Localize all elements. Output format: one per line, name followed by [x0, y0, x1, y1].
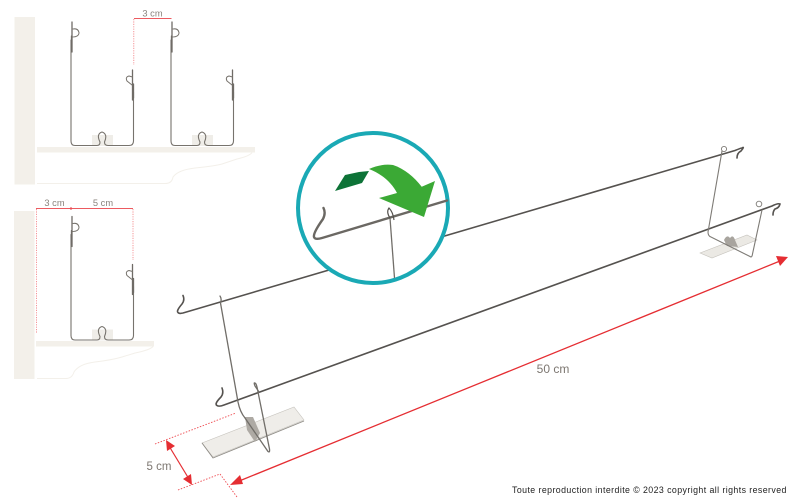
label: 50 cm: 50 cm [537, 362, 569, 376]
clip [724, 236, 738, 247]
shelf [36, 341, 154, 346]
wall [14, 17, 35, 184]
plate [700, 235, 757, 258]
front wire [216, 204, 780, 406]
panel: lower section view, 3 cm and 5 cm [14, 198, 154, 379]
hanger wire [708, 151, 762, 257]
profile [71, 216, 134, 340]
dimension: 5 cm arrow with guides [155, 413, 237, 497]
hanger stem [390, 218, 394, 278]
plate [202, 407, 304, 457]
dimension lines [36, 207, 133, 333]
shelf [37, 147, 255, 152]
right plate bracket [700, 146, 762, 258]
label: 5 cm: 5 cm [93, 198, 113, 208]
circle [298, 133, 448, 283]
icon: dark green arrow tail [335, 171, 369, 191]
icon: green curved arrow [369, 165, 435, 217]
wall [14, 211, 34, 379]
label: 5 cm: 5 cm [147, 461, 171, 473]
left plate bracket [202, 296, 304, 458]
panel: top section view, 3 cm spacing [14, 8, 255, 184]
enlarged wire [314, 200, 447, 239]
moulding [37, 152, 252, 184]
dimension line: 3 cm [134, 18, 172, 65]
right profile [171, 22, 234, 146]
label: 3 cm: 3 cm [142, 8, 163, 18]
moulding [37, 346, 153, 378]
hanger top loop [721, 146, 727, 152]
hanger lower loop [756, 201, 762, 207]
hanger wire [220, 296, 270, 452]
clip [245, 417, 260, 442]
hanger loop [388, 208, 394, 220]
dimension: 50 cm arrow [230, 256, 788, 485]
left profile [71, 22, 134, 146]
back wire [178, 147, 743, 313]
label: 3 cm: 3 cm [44, 198, 65, 208]
plate front edge [202, 421, 304, 458]
zoom circle detail [298, 133, 448, 283]
copyright note: Toute reproduction interdite © 2023 copyright all rights reserved [512, 485, 787, 495]
